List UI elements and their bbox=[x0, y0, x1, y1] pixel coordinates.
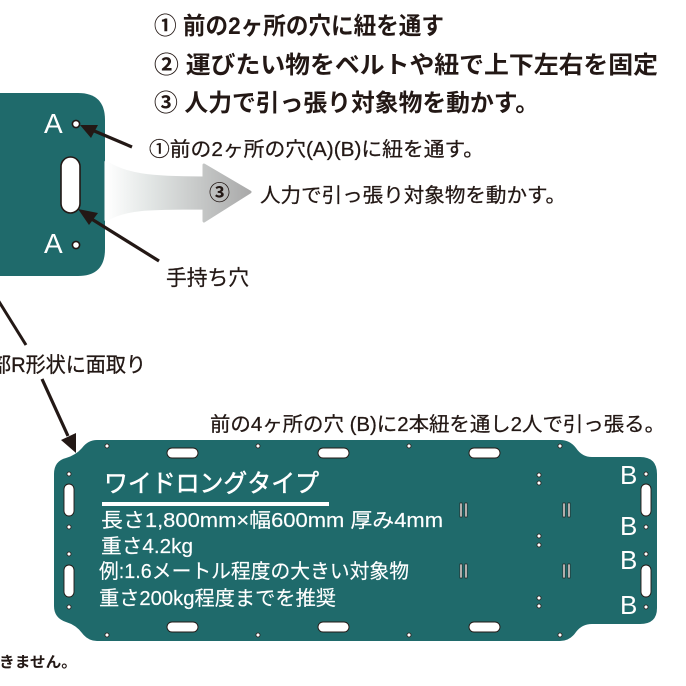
arrow: to hand slot bbox=[78, 209, 159, 261]
heading: three steps: ① 前の2ヶ所の穴に紐を通す bbox=[154, 13, 444, 40]
text: hole instruction: ①前の2ヶ所の穴(A)(B)に紐を通す。 bbox=[149, 138, 484, 161]
arrow: pull direction bbox=[106, 162, 250, 221]
label B: B bbox=[620, 590, 637, 620]
board specs: 長さ1,800mm×幅600mm 厚み4mm bbox=[101, 509, 443, 532]
board specs: 重さ4.2kg bbox=[101, 535, 193, 558]
text: hand hole: 手持ち穴 bbox=[166, 267, 249, 290]
label B bbox=[620, 460, 637, 620]
arrow: to hole A bbox=[80, 125, 132, 147]
label: A top: A bbox=[44, 108, 63, 139]
text: pull instruction: 人力で引っ張り対象物を動かす。 bbox=[260, 184, 566, 207]
board specs: 例:1.6メートル程度の大きい対象物 bbox=[99, 560, 409, 583]
board specs: 重さ200kg程度までを推奨 bbox=[99, 587, 336, 610]
label: A bottom: A bbox=[44, 228, 63, 259]
board specs bbox=[99, 509, 443, 610]
panel: close-up of board end bbox=[0, 93, 105, 276]
hand slot bbox=[61, 157, 80, 213]
label B: B bbox=[620, 460, 637, 490]
arrow number: ③ bbox=[209, 182, 230, 205]
arrow: to board corner bbox=[42, 379, 76, 453]
heading: three steps: ② 運びたい物をベルトや紐で上下左右を固定 bbox=[154, 52, 658, 79]
label B: B bbox=[620, 511, 637, 541]
label B: B bbox=[620, 545, 637, 575]
heading: three steps: ③ 人力で引っ張り対象物を動かす。 bbox=[154, 90, 539, 117]
title underline bbox=[102, 502, 329, 506]
text: two person pull: 前の4ヶ所の穴 (B)に2本紐を通し2人で引っ張る。 bbox=[210, 413, 665, 436]
arrow: upper corner line bbox=[0, 300, 26, 345]
holes: board bbox=[67, 444, 648, 637]
text: cut-off footnote: きません。 bbox=[0, 654, 77, 671]
hole: bottom bbox=[72, 241, 80, 249]
board title: ワイドロングタイプ bbox=[104, 470, 319, 498]
hole: top bbox=[72, 120, 80, 128]
panel: wide long type board bbox=[54, 440, 657, 641]
heading: three steps bbox=[154, 13, 658, 117]
slots: board bbox=[64, 448, 651, 632]
strap slits bbox=[460, 503, 570, 578]
